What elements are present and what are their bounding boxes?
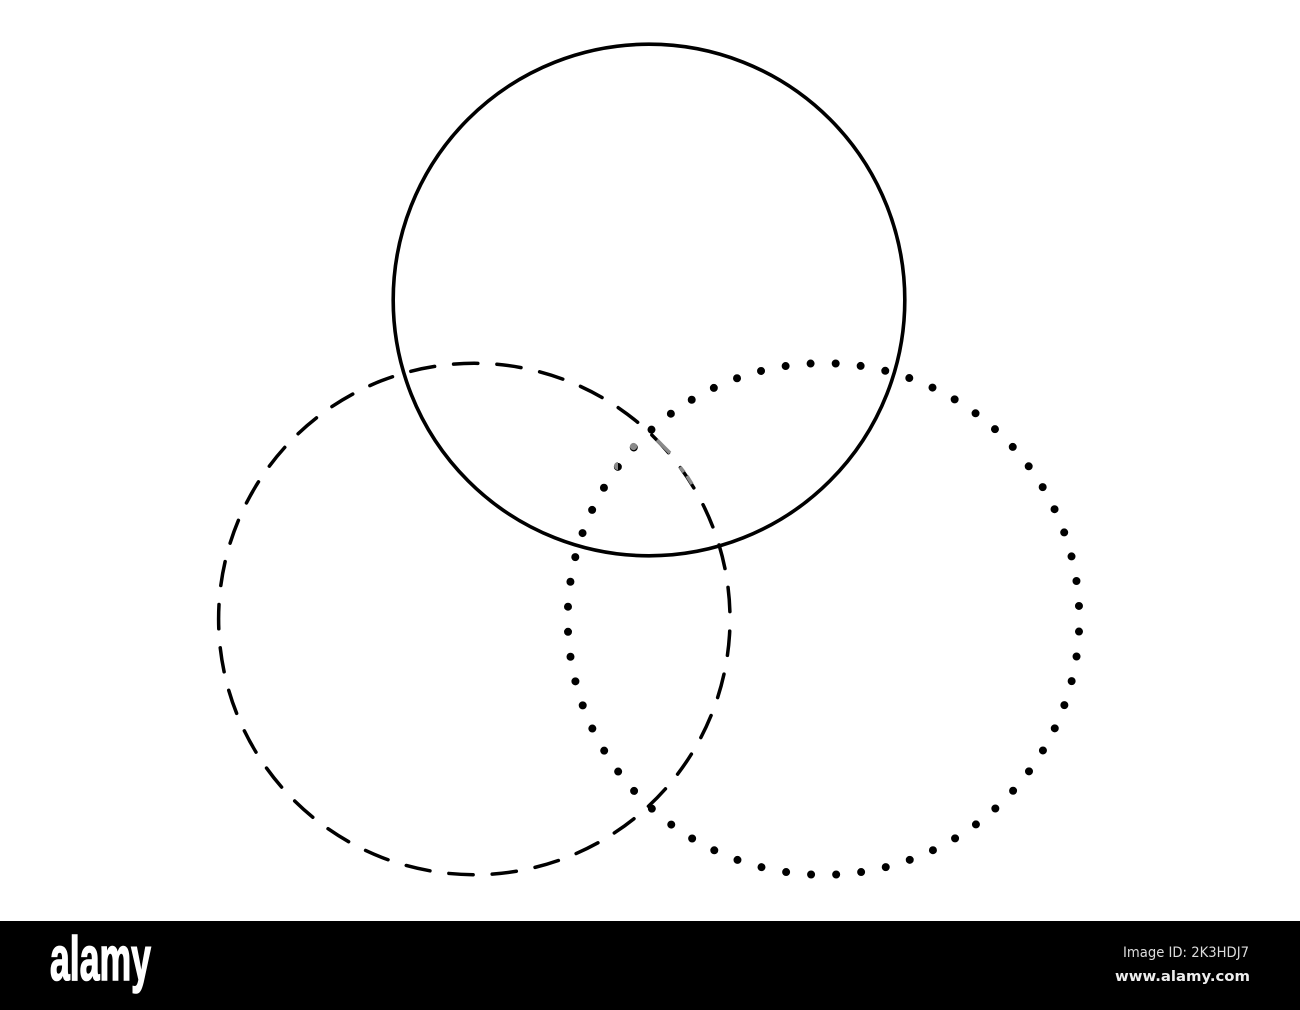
logo: alamy: alamy <box>50 925 151 994</box>
footer bar <box>0 921 1300 1010</box>
solid circle: top <box>393 44 905 556</box>
dotted circle: lower right <box>568 363 1079 875</box>
website: www.alamy.com <box>1115 968 1250 985</box>
faded marks near the top intersection <box>614 440 692 484</box>
dashed circle: lower left <box>219 363 730 875</box>
image id: Image ID: 2K3HDJ7 <box>1123 945 1249 961</box>
